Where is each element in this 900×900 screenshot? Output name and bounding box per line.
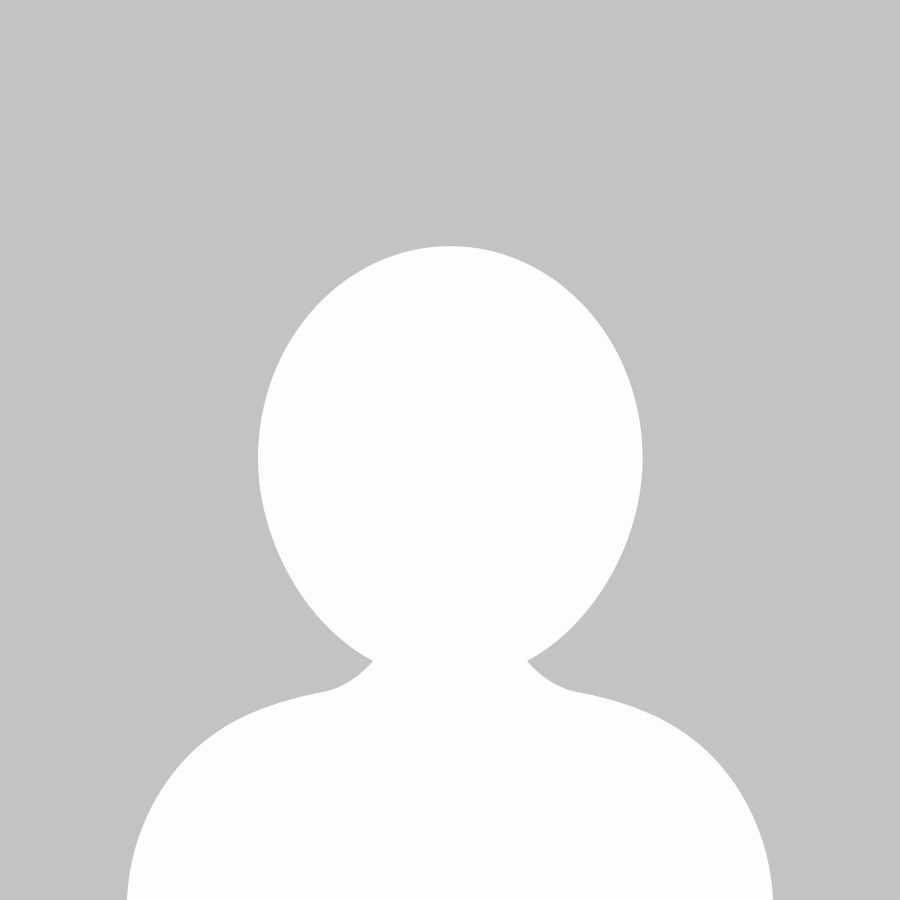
icon: person silhouette [127, 246, 773, 900]
